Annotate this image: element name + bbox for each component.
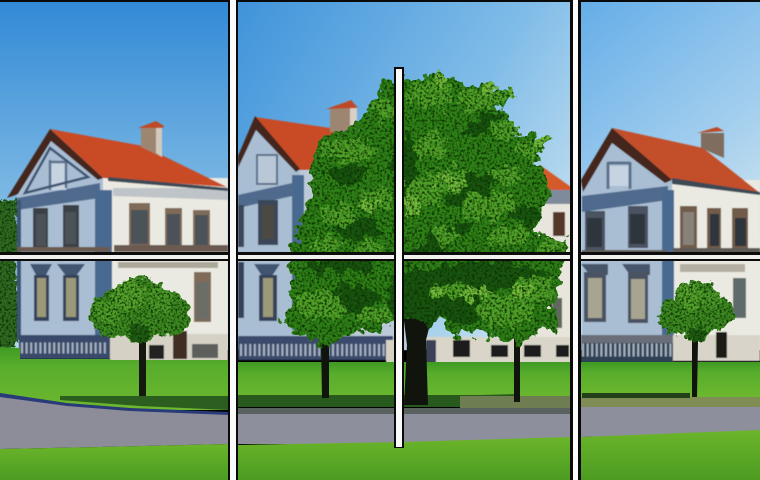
house: right — [581, 127, 760, 363]
house: middle — [237, 100, 571, 366]
base — [581, 335, 673, 343]
lawn — [238, 362, 570, 396]
lawn shadow — [60, 396, 229, 410]
light clusters — [294, 81, 566, 326]
front lawn — [237, 437, 571, 480]
house: left — [7, 121, 228, 361]
right vertical mullion — [570, 0, 581, 480]
lawn — [0, 347, 229, 410]
chimney — [141, 128, 162, 157]
front lawn — [580, 430, 760, 480]
base — [19, 335, 110, 359]
windows — [258, 200, 278, 245]
windows: upper floor — [33, 203, 210, 248]
tree: small right — [659, 280, 734, 397]
panel: right window pane — [580, 0, 760, 480]
left vertical mullion — [228, 0, 238, 480]
centre vertical muntin — [394, 67, 404, 448]
lawn shadow — [237, 394, 520, 407]
sky — [237, 0, 571, 350]
road — [580, 407, 760, 437]
dirt strip — [580, 397, 760, 408]
panel: middle window pane — [237, 0, 571, 480]
sky — [0, 0, 229, 350]
windows — [585, 206, 748, 251]
shadow clusters — [305, 107, 550, 324]
lawn — [580, 362, 760, 398]
front lawn — [0, 444, 229, 480]
house: right part — [530, 203, 570, 338]
roof — [612, 128, 760, 193]
roof — [256, 116, 340, 170]
trunks — [321, 318, 520, 405]
chimney — [701, 133, 724, 158]
top edge — [0, 0, 760, 2]
tree: large centre — [283, 72, 570, 345]
windows: lower floor — [30, 264, 85, 276]
road — [0, 395, 229, 449]
chimney — [329, 108, 350, 133]
tree: small left — [90, 277, 190, 396]
background trees — [0, 200, 17, 347]
panel: left window pane — [0, 0, 229, 480]
base — [238, 336, 393, 360]
sky — [580, 0, 760, 350]
gaps in foliage — [422, 190, 510, 228]
horizontal muntin — [0, 252, 760, 261]
roof — [50, 129, 227, 187]
road — [237, 414, 571, 444]
